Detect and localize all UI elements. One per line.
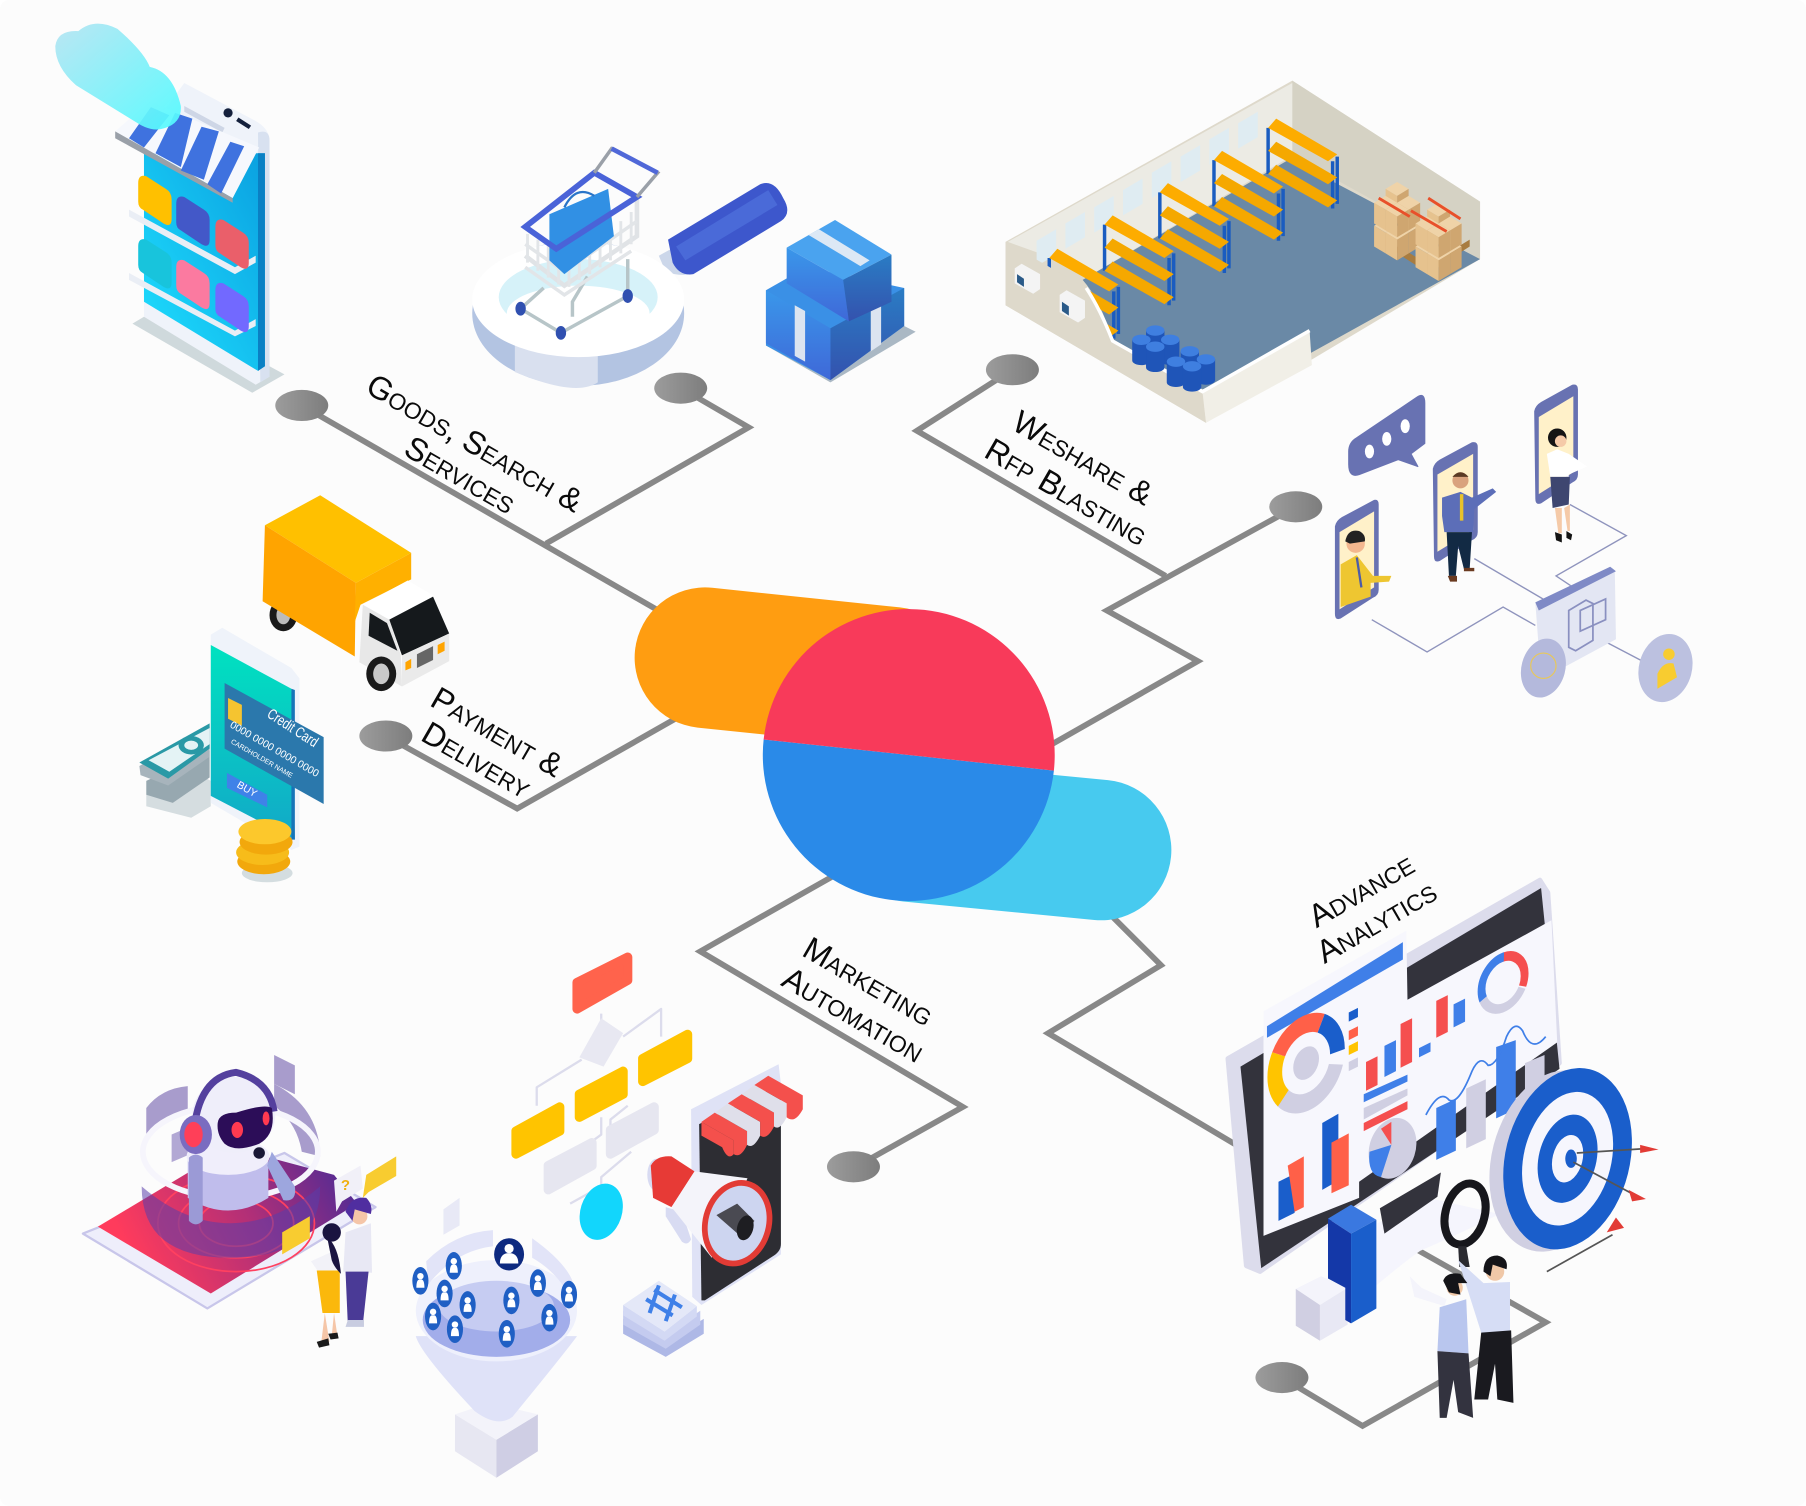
pallets of boxes — [1374, 182, 1470, 281]
magnifying glass — [1438, 1179, 1492, 1267]
robot body — [188, 1156, 268, 1211]
bars with trend line — [1426, 1026, 1546, 1160]
low front walls — [1202, 331, 1312, 423]
phone 2 with man — [1433, 442, 1496, 582]
connector: weshare and rfp blasting — [917, 354, 1322, 746]
central logo — [705, 609, 1101, 901]
credit card — [225, 683, 324, 804]
credit card: CARDHOLDER NAME — [229, 739, 294, 780]
front wheel — [366, 657, 396, 691]
base box — [455, 1414, 496, 1478]
cargo box — [265, 495, 411, 583]
label line: services: Services — [398, 429, 522, 521]
cart — [515, 149, 658, 340]
woman — [311, 1223, 341, 1348]
cab — [363, 581, 435, 620]
buy button: BUY — [235, 780, 259, 800]
mail panel — [1535, 567, 1616, 680]
outer walls — [1006, 81, 1480, 423]
rear wheel — [270, 599, 297, 631]
label line: advance: Advance — [1302, 845, 1420, 934]
yellow nodes — [516, 1107, 560, 1154]
label line: delivery: Delivery — [416, 714, 538, 806]
air conditioners — [1015, 264, 1040, 294]
blue header — [1267, 942, 1403, 1038]
label line: goods, search: Goods, Search & — [360, 367, 589, 519]
user badge — [1631, 628, 1700, 708]
coins — [236, 819, 293, 882]
illustration: marketing flowchart — [516, 957, 688, 1245]
phone — [691, 1064, 781, 1305]
shelving units — [1049, 119, 1337, 339]
connector: goods and services — [275, 373, 749, 613]
mini donut — [1482, 949, 1525, 1016]
connector: advance analytics — [1048, 910, 1546, 1426]
logo: blue half circle — [763, 739, 1054, 901]
connector: payment and delivery — [359, 716, 680, 809]
concentric rings — [158, 1175, 314, 1272]
lens — [472, 241, 684, 386]
phone — [211, 628, 299, 850]
illustration: hashtag stack — [623, 1281, 704, 1357]
illustration: delivery truck — [263, 495, 449, 691]
bottom bars — [1278, 1174, 1295, 1221]
label line: payment: Payment & — [425, 680, 570, 784]
floor — [1083, 159, 1480, 389]
node: marketing — [827, 1151, 880, 1182]
phone 1 with man — [1335, 500, 1391, 619]
illustration: chatbot on tablet: ? — [341, 1177, 350, 1194]
dashboard panels — [1264, 920, 1557, 1236]
illustration: megaphone on storefront phone — [647, 1064, 803, 1305]
credit card: 0000 0000 0000 0000 — [228, 720, 321, 780]
user icons — [412, 1238, 577, 1348]
man — [343, 1198, 372, 1327]
label line: marketing: Marketing — [797, 930, 940, 1033]
monitor stand — [1376, 1198, 1500, 1285]
target badge — [1515, 633, 1572, 703]
arc panels — [426, 1230, 572, 1302]
analyst 2 — [1410, 1273, 1473, 1418]
illustration: mobile store with cloud — [55, 24, 284, 393]
label line: weshare: Weshare & — [1007, 403, 1159, 512]
illustration: mobile payment — [139, 628, 324, 882]
connector: marketing automation — [700, 873, 963, 1182]
donut chart — [1275, 1013, 1337, 1114]
red node — [577, 957, 628, 1009]
funnel cone — [416, 1336, 577, 1421]
illustration: stacked parcels — [766, 220, 916, 382]
target with arrows — [1471, 1054, 1659, 1272]
buy button — [227, 773, 267, 807]
megaphone — [647, 1156, 782, 1274]
legend — [1349, 1008, 1358, 1022]
label line: analytics: Analytics — [1310, 873, 1443, 970]
horizontal bars — [1364, 1075, 1407, 1102]
chat bubble — [1349, 395, 1425, 475]
label line: rfp blasting: Rfp Blasting — [979, 431, 1154, 553]
logo: cyan capsule — [910, 832, 1101, 850]
node: analytics — [1255, 1362, 1308, 1393]
screen — [1240, 888, 1560, 1268]
halo arcs — [142, 1084, 320, 1258]
phone 3 with woman — [1534, 385, 1587, 543]
illustration: lead funnel — [412, 1198, 577, 1478]
panel — [274, 1055, 295, 1094]
cloud — [55, 24, 181, 129]
awning — [701, 1076, 803, 1156]
node: weshare — [986, 354, 1039, 385]
node: goods — [275, 390, 328, 421]
illustration: warehouse — [1006, 81, 1480, 423]
links — [537, 1009, 661, 1204]
illustration: video calling people — [1335, 385, 1700, 708]
cyan node — [573, 1178, 630, 1245]
logo: red half circle — [764, 609, 1055, 771]
handle — [659, 183, 787, 275]
node: search — [654, 373, 707, 404]
bar chart top — [1366, 995, 1448, 1091]
illustration: analytics monitor — [1228, 880, 1659, 1418]
analyst 1 — [1458, 1255, 1513, 1403]
shelf boards — [129, 210, 256, 336]
node: rfp blasting — [1269, 491, 1322, 522]
white cube — [1296, 1276, 1348, 1305]
blue column — [1328, 1205, 1376, 1234]
label line: automation: Automation — [776, 960, 931, 1070]
illustration: magnifier with shopping cart — [472, 149, 787, 388]
node: payment — [359, 720, 412, 752]
awning — [115, 101, 259, 203]
blue barrels — [1132, 325, 1215, 392]
grey nodes — [548, 1143, 592, 1190]
robot head — [192, 1077, 275, 1153]
illustration: chatbot on tablet — [83, 1055, 396, 1348]
windows — [1037, 112, 1258, 266]
flow lines — [1372, 505, 1642, 661]
decision diamond — [579, 1018, 623, 1067]
credit card: Credit Card — [264, 705, 322, 751]
bezel — [1228, 880, 1560, 1272]
pie chart — [1361, 1112, 1424, 1185]
tablet — [83, 1153, 375, 1308]
speech bubbles — [334, 1166, 363, 1212]
app icons — [138, 176, 249, 332]
logo: orange capsule — [705, 658, 893, 677]
banknotes — [139, 723, 211, 818]
